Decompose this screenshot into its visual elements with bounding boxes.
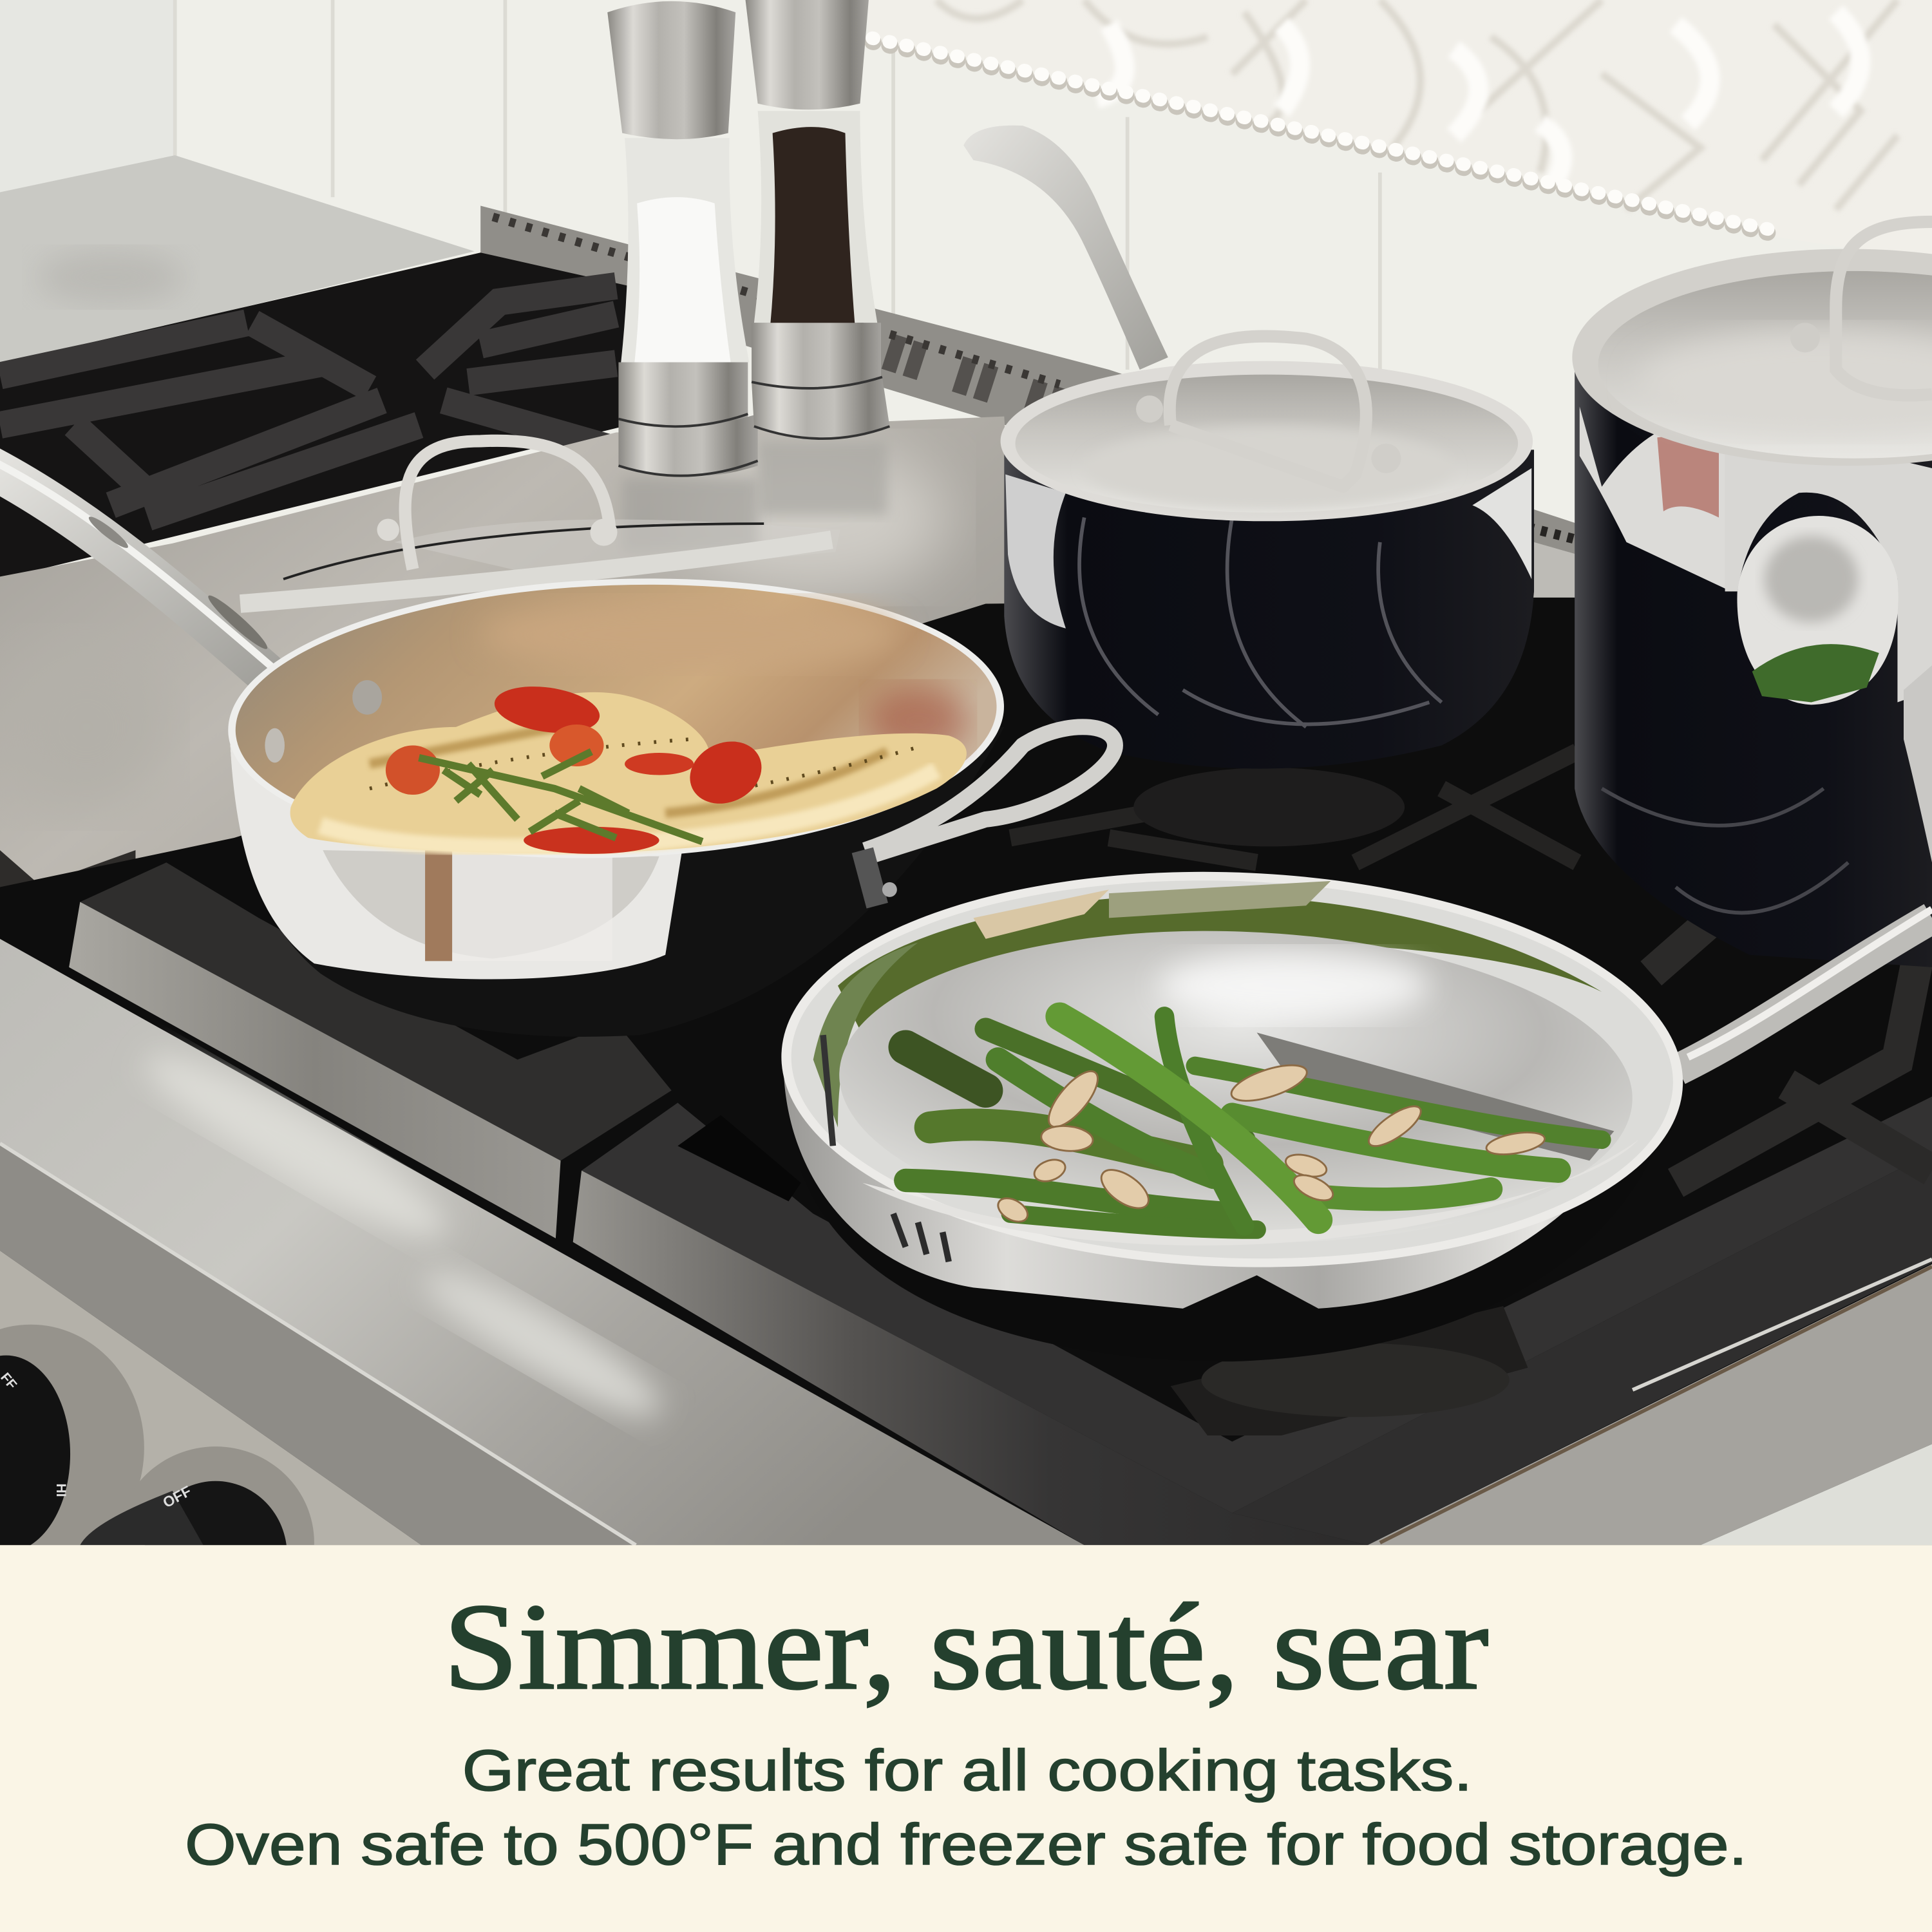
stove knobs	[0, 1325, 314, 1639]
cherry tomatoes	[386, 680, 772, 854]
saute pan long handle	[0, 459, 277, 680]
almond slices	[994, 1058, 1546, 1227]
asparagus	[905, 1016, 1602, 1229]
stove knobs: HI	[53, 1484, 68, 1497]
description line 2: Oven safe to 500°F and freezer safe for food storage.	[185, 1813, 1747, 1877]
panel: caption band	[0, 1545, 1932, 1932]
front stainless rail	[0, 939, 1932, 1545]
wall tiles	[0, 0, 1932, 591]
dill sprig	[419, 752, 703, 842]
pepper mill	[746, 0, 889, 439]
saute pan helper handle	[862, 727, 1115, 905]
glass lid	[240, 440, 840, 604]
stove back vent	[480, 206, 1577, 604]
lower burner grates	[0, 598, 1932, 1545]
countertop	[0, 155, 475, 366]
left burner grate	[0, 252, 629, 579]
stainless cooktop plate	[0, 417, 1016, 959]
saucepan long handle	[963, 126, 1168, 370]
saute pan	[223, 565, 1009, 1037]
description line 1: Great results for all cooking tasks.	[462, 1739, 1472, 1803]
skillet	[775, 857, 1690, 1361]
fish fillets	[290, 692, 967, 853]
stockpot	[1572, 222, 1932, 967]
ornate backsplash	[869, 0, 1932, 261]
heading: Simmer, sauté, sear	[444, 1579, 1488, 1715]
saucepan	[1001, 336, 1534, 769]
stove knobs: OFF	[160, 1482, 194, 1511]
salt mill	[607, 1, 758, 477]
skillet handle	[1678, 909, 1932, 1070]
